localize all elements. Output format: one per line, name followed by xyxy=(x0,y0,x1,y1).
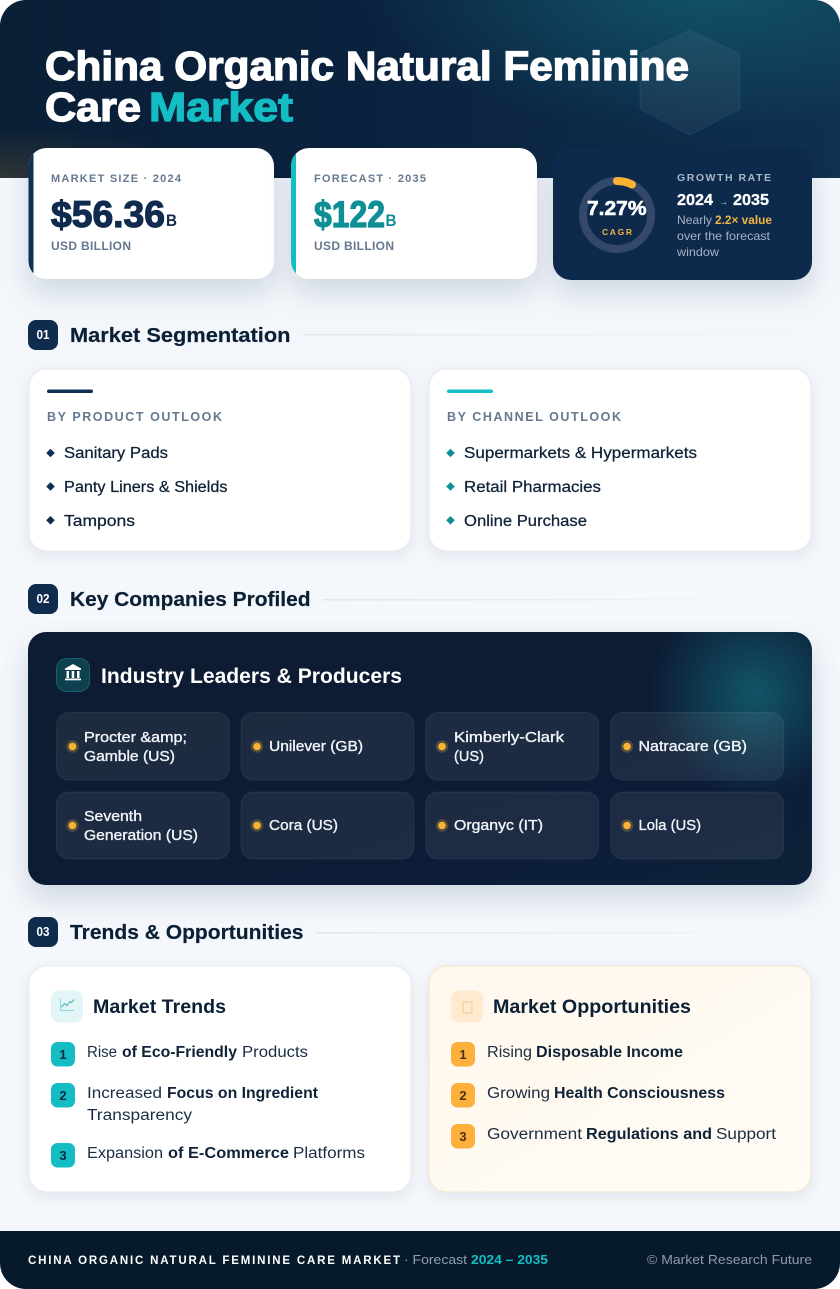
stat card: forecast 2035: FORECAST · 2035 xyxy=(314,173,426,185)
CAGR ring xyxy=(583,181,651,249)
trend 2: Focus on Ingredient xyxy=(167,1085,318,1102)
list: channel items: Retail Pharmacies xyxy=(464,479,601,496)
opportunity 1: 1 xyxy=(459,1047,467,1062)
footer: © Market Research Future xyxy=(647,1253,812,1267)
title xyxy=(46,50,688,122)
panel: channel outlook: BY CHANNEL OUTLOOK xyxy=(447,410,621,424)
list: product items: Panty Liners & Shields xyxy=(64,479,228,496)
opportunity 2: Growing xyxy=(487,1085,550,1102)
opportunity 3: Support xyxy=(716,1126,777,1143)
title: China Organic Natural Feminine xyxy=(45,43,689,89)
company: Natracare: Natracare (GB) xyxy=(638,739,747,755)
stat card: forecast 2035: USD BILLION xyxy=(314,239,394,253)
header band xyxy=(0,0,840,178)
stat card: market size 2024: USD BILLION xyxy=(51,239,131,253)
stat card: CAGR growth rate: over the forecast xyxy=(677,229,771,243)
opportunity 2: 2 xyxy=(459,1088,467,1103)
list: product items xyxy=(46,445,228,530)
list: channel items: Online Purchase xyxy=(464,513,587,530)
panel: market trends: Market Trends xyxy=(93,996,226,1018)
opportunity 1: Disposable Income xyxy=(536,1044,683,1061)
trend 1: 1 xyxy=(59,1047,67,1062)
company: Procter & Gamble: Procter &amp; xyxy=(84,730,187,746)
footer xyxy=(0,1231,840,1289)
list: channel items xyxy=(446,445,697,530)
section heading 03 xyxy=(28,917,614,947)
footer: CHINA ORGANIC NATURAL FEMININE CARE MARKET xyxy=(28,1255,400,1267)
trend 2: Transparency xyxy=(87,1107,192,1124)
trend 2: Increased xyxy=(87,1085,162,1102)
trend 3: of E-Commerce xyxy=(168,1145,289,1162)
company: Kimberly-Clark xyxy=(426,712,599,780)
trend 3 xyxy=(51,1143,365,1168)
section heading 02: Key Companies Profiled xyxy=(70,588,310,611)
trend 1 xyxy=(51,1042,308,1066)
company: Lola: Lola (US) xyxy=(638,818,701,834)
section heading 01: 01 xyxy=(36,328,50,342)
section heading 02: 02 xyxy=(36,592,50,606)
section heading 01: Market Segmentation xyxy=(70,324,290,347)
stat card: market size 2024 xyxy=(28,148,274,279)
panel: market opportunities: Market Opportunities xyxy=(493,996,691,1018)
section heading 03: 03 xyxy=(36,925,50,939)
trend 3: 3 xyxy=(59,1148,67,1163)
stat card: forecast 2035: B xyxy=(386,211,396,230)
company: Natracare xyxy=(611,712,784,780)
company: Unilever: Unilever (GB) xyxy=(269,739,363,755)
icon: line chart xyxy=(51,990,83,1022)
list: channel items: Supermarkets & Hypermarkets xyxy=(464,445,697,462)
panel: market opportunities xyxy=(429,966,811,1192)
trend 1: Products xyxy=(242,1044,308,1061)
CAGR ring: CAGR xyxy=(602,227,632,237)
panel: product outlook xyxy=(29,369,411,551)
stat card: CAGR growth rate: → xyxy=(719,197,728,208)
company: Seventh Generation xyxy=(56,792,230,859)
list: product items: Sanitary Pads xyxy=(64,445,168,462)
icon: bank building xyxy=(56,658,90,692)
opportunity 3: Regulations and xyxy=(586,1126,712,1143)
panel: channel outlook xyxy=(429,369,811,551)
trend 2: 2 xyxy=(59,1088,67,1103)
company: Cora: Cora (US) xyxy=(269,818,338,834)
footer: · Forecast xyxy=(404,1253,468,1267)
section heading 03: Trends & Opportunities xyxy=(70,921,304,944)
stat card: CAGR growth rate: 2035 xyxy=(733,192,769,209)
company: Seventh Generation: Seventh xyxy=(84,809,142,825)
trend 1: Rise xyxy=(87,1044,117,1061)
opportunity 3: 3 xyxy=(459,1129,467,1144)
opportunity 1 xyxy=(451,1042,683,1066)
panel: market trends xyxy=(29,966,411,1192)
icon: missing glyph box xyxy=(451,990,483,1022)
stat card: CAGR growth rate: Nearly xyxy=(677,213,712,227)
section heading 01 xyxy=(28,320,606,350)
section heading 02 xyxy=(28,584,614,614)
company: Unilever xyxy=(241,712,414,780)
title: Care xyxy=(45,84,141,130)
trend 3: Expansion xyxy=(87,1145,163,1162)
trend 3: Platforms xyxy=(293,1145,365,1162)
opportunity 3: Government xyxy=(487,1126,583,1143)
company: Cora xyxy=(241,792,414,859)
company: Seventh Generation: Generation (US) xyxy=(84,828,198,844)
panel: product outlook: BY PRODUCT OUTLOOK xyxy=(47,410,222,424)
decorative hexagon xyxy=(640,30,740,135)
company: Lola xyxy=(611,792,784,859)
trend 1: of Eco-Friendly xyxy=(122,1044,237,1061)
stat card: CAGR growth rate: GROWTH RATE xyxy=(677,172,771,184)
stat card: CAGR growth rate: window xyxy=(676,245,719,259)
stat card: forecast 2035: $122 xyxy=(314,194,385,235)
trend 2 xyxy=(51,1083,318,1124)
footer: 2024 – 2035 xyxy=(471,1253,548,1267)
stat card: CAGR growth rate: 2.2× value xyxy=(715,213,772,227)
panel: industry leaders: Industry Leaders & Producers xyxy=(101,664,402,688)
stat card: CAGR growth rate xyxy=(553,148,812,280)
company: Procter & Gamble xyxy=(56,712,230,780)
company: Organyc xyxy=(426,792,599,859)
company: Procter & Gamble: Gamble (US) xyxy=(84,749,175,765)
list: product items: Tampons xyxy=(64,513,135,530)
stat card: market size 2024: B xyxy=(166,211,177,230)
panel: industry leaders xyxy=(28,632,812,885)
company: Kimberly-Clark: Kimberly-Clark xyxy=(454,730,565,746)
opportunity 2 xyxy=(451,1083,725,1108)
stat card: market size 2024: $56.36 xyxy=(51,194,165,235)
CAGR ring: 7.27% xyxy=(587,197,646,220)
company: Organyc: Organyc (IT) xyxy=(454,818,543,834)
opportunity 2: Health Consciousness xyxy=(554,1085,725,1102)
opportunity 3 xyxy=(451,1124,777,1148)
company: Kimberly-Clark: (US) xyxy=(454,749,484,765)
stat card: forecast 2035 xyxy=(291,148,537,279)
stat card: CAGR growth rate: 2024 xyxy=(677,192,713,209)
title: Market xyxy=(149,84,293,130)
opportunity 1: Rising xyxy=(487,1044,532,1061)
stat card: market size 2024: MARKET SIZE · 2024 xyxy=(51,173,182,185)
